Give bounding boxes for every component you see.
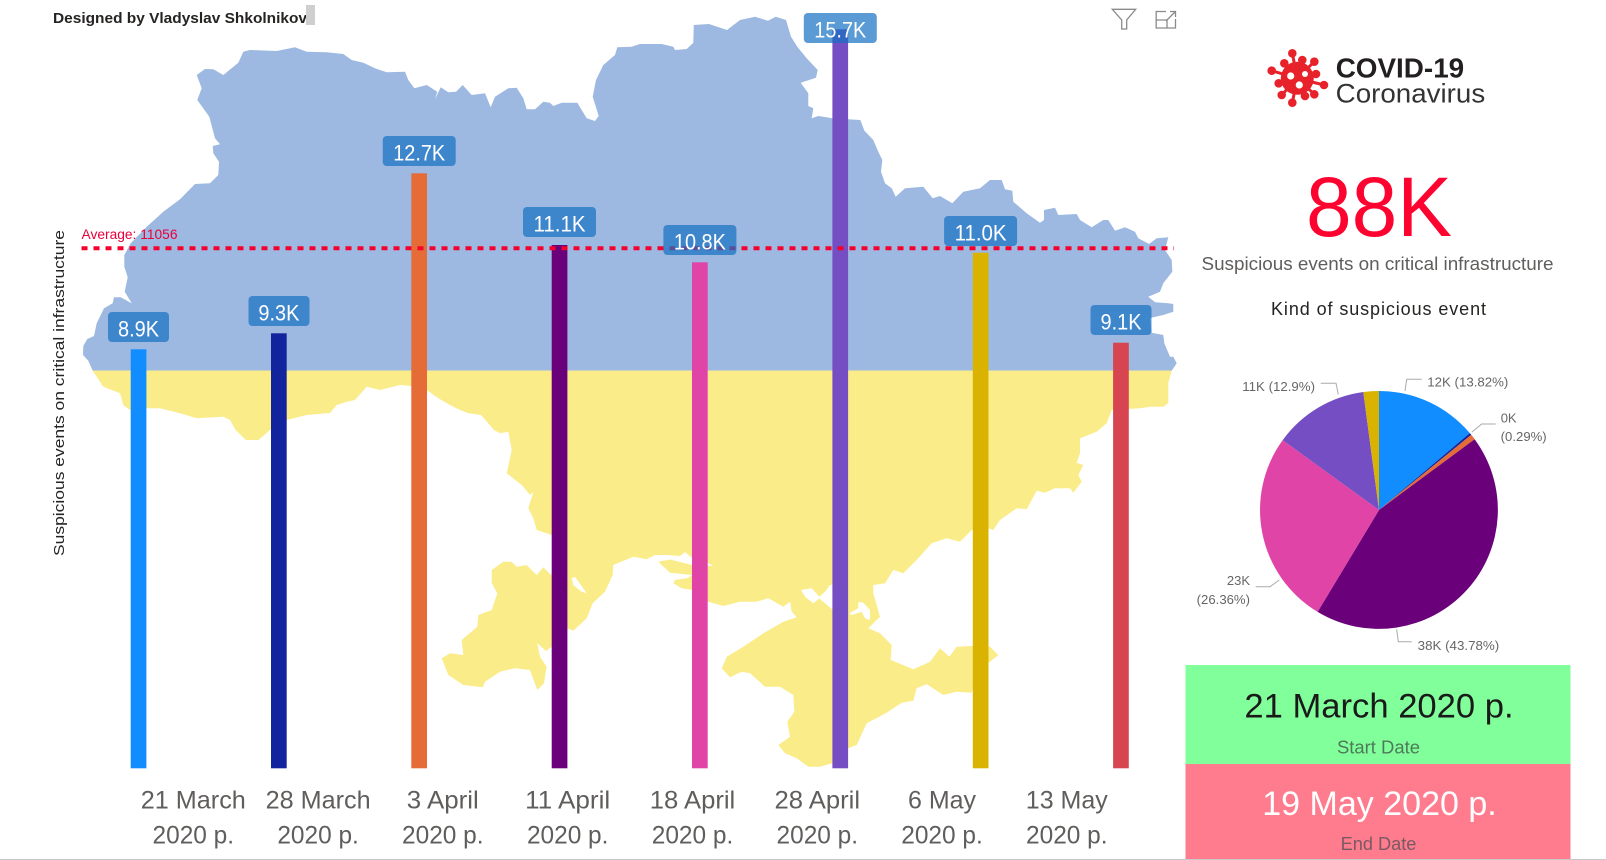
slice: 13.82%: [1379, 391, 1470, 510]
label: 9.3K: [248, 296, 310, 326]
label: 10.8K: [663, 225, 736, 255]
x-axis date labels: 21 March: [141, 786, 246, 814]
slice: gold: [1363, 391, 1379, 510]
slice: 26.36%: [1260, 440, 1379, 612]
column chart bars: [131, 29, 1129, 768]
average reference line: Average: 11056: [82, 227, 178, 242]
pie label: 23K: (26.36%): [1197, 592, 1250, 607]
card: start date: Start Date: [1337, 737, 1420, 757]
pie label: 23K: 23K: [1227, 573, 1250, 588]
label: 15.7K: [804, 13, 877, 43]
pie chart: kind of suspicious event: [1260, 391, 1498, 629]
x-axis date labels: 2020 p.: [901, 821, 983, 849]
x-axis date labels: 28 April: [775, 786, 860, 814]
bar: 3 April: [411, 173, 427, 768]
credit heading: Designed by Vladyslav Shkolnikov: [53, 10, 308, 27]
x-axis date labels: 28 March: [266, 786, 371, 814]
label: 8.9K: 8.9K: [118, 317, 159, 342]
logo: COVID-19 Coronavirus: COVID-19: [1336, 52, 1464, 83]
card: end date: [1186, 764, 1570, 859]
label: 8.9K: [108, 312, 169, 342]
label: 11.1K: [523, 207, 596, 237]
pie label: 0K: (0.29%): [1501, 429, 1547, 444]
label: 9.1K: 9.1K: [1100, 310, 1142, 335]
x-axis date labels: 2020 p.: [277, 821, 359, 849]
KPI: total events: [1202, 160, 1554, 274]
bar: 6 May: [973, 253, 988, 768]
pie label: 0K: [1472, 410, 1547, 444]
x-axis date labels: 13 May: [1026, 786, 1108, 814]
slice: 0.29%: [1379, 433, 1471, 510]
pie label: 12K: 12K (13.82%): [1427, 375, 1508, 390]
icon: filter funnel: [1112, 9, 1136, 29]
label: 9.3K: 9.3K: [258, 301, 300, 326]
pie chart heading: Kind of suspicious event: [1271, 299, 1486, 319]
slice: orange: [1379, 435, 1475, 510]
label: 10.8K: 10.8K: [674, 230, 726, 255]
card: end date: 19 May 2020 p.: [1262, 785, 1497, 823]
x-axis date labels: 2020 p.: [402, 821, 484, 849]
bar: 28 April: [832, 29, 848, 768]
x-axis date labels: 6 May: [908, 786, 976, 814]
logo: COVID-19 Coronavirus: [1267, 49, 1485, 109]
bar: 13 May: [1113, 343, 1129, 768]
logo: COVID-19 Coronavirus: Coronavirus: [1336, 79, 1485, 109]
x-axis date labels: 18 April: [650, 786, 735, 814]
bar: 21 March: [131, 349, 146, 768]
label: 12.7K: 12.7K: [393, 141, 445, 166]
pie label: 23K: [1197, 573, 1279, 607]
data labels: [108, 13, 1152, 342]
icon: red virus: [1267, 49, 1328, 107]
map of Ukraine in flag colours: [83, 17, 1177, 767]
slice: 12.9%: [1283, 392, 1379, 510]
pie label: 38K: 38K (43.78%): [1418, 638, 1499, 653]
card: start date: [1186, 665, 1570, 764]
x-axis date labels: 2020 p.: [153, 821, 234, 849]
pie label: 38K: [1397, 629, 1499, 653]
bar: 18 April: [692, 262, 708, 768]
KPI: total events: 88K: [1306, 160, 1452, 254]
x-axis date labels: [141, 786, 1108, 849]
bar: 28 March: [271, 333, 287, 768]
x-axis date labels: 2020 p.: [527, 821, 608, 849]
label: 11.0K: 11.0K: [955, 221, 1007, 246]
label: 15.7K: 15.7K: [814, 18, 867, 43]
x-axis date labels: 2020 p.: [652, 821, 733, 849]
y-axis title: Suspicious events on critical infrastructure: [52, 230, 68, 556]
card: start date: 21 March 2020 p.: [1244, 687, 1514, 725]
label: 11.0K: [944, 216, 1017, 246]
label: 9.1K: [1090, 305, 1152, 335]
x-axis date labels: 2020 p.: [777, 821, 858, 849]
pie label: 0K: 0K: [1501, 410, 1517, 425]
slice: 43.78%: [1318, 439, 1498, 629]
bar: 11 April: [552, 245, 567, 768]
label: 12.7K: [383, 136, 456, 166]
card: end date: End Date: [1341, 834, 1416, 854]
label: 11.1K: 11.1K: [534, 212, 586, 237]
pie label: 11K: 11K (12.9%): [1242, 379, 1315, 394]
x-axis date labels: 3 April: [407, 786, 479, 814]
icon: focus mode: [1156, 12, 1176, 28]
x-axis date labels: 11 April: [525, 786, 610, 814]
x-axis date labels: 2020 p.: [1026, 821, 1108, 849]
KPI: total events: Suspicious events on critical infrastructure: [1202, 254, 1554, 274]
